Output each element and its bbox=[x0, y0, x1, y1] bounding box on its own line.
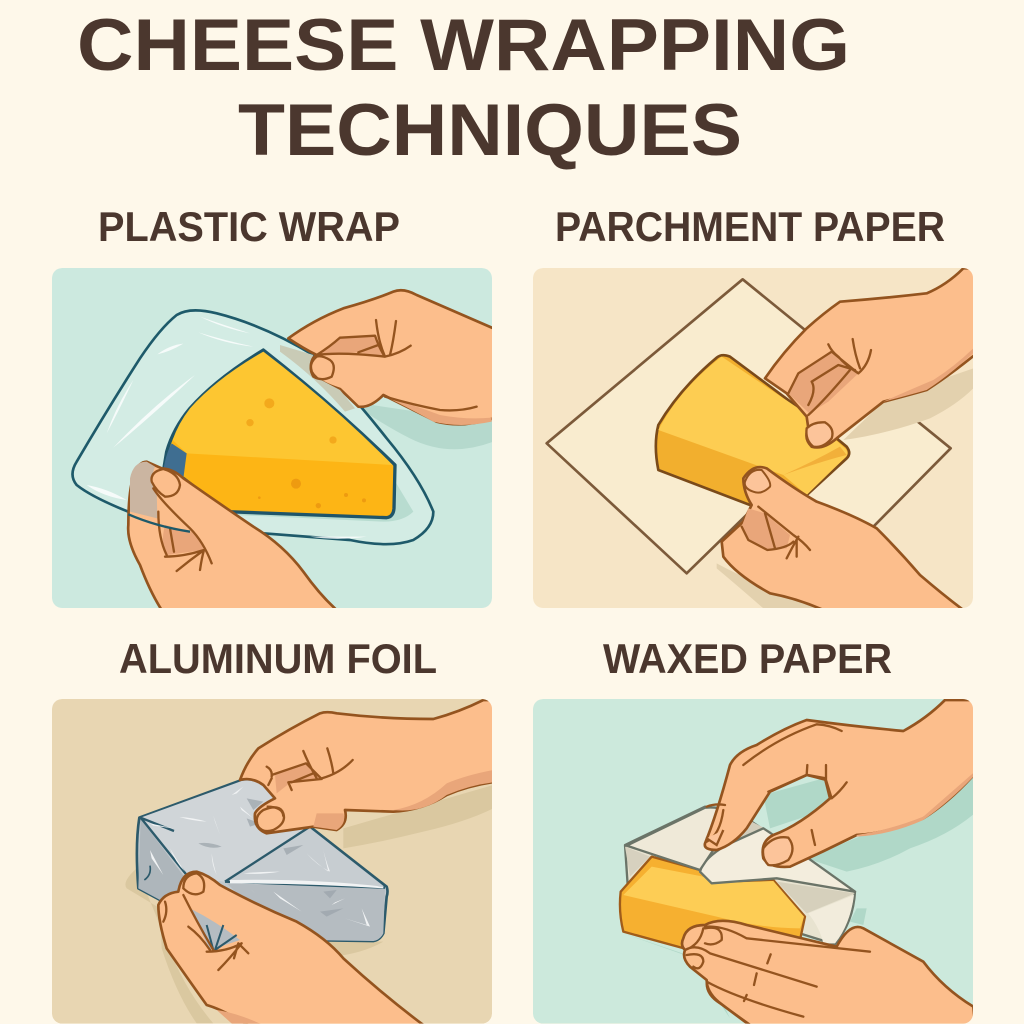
heading: parchment paper: PARCHMENT PAPER bbox=[555, 203, 945, 250]
cheese block bbox=[656, 355, 849, 505]
shadows bbox=[717, 368, 973, 608]
lower hand bbox=[722, 467, 963, 610]
lower hand bbox=[158, 872, 427, 1024]
title bbox=[77, 5, 850, 171]
right hand bbox=[280, 290, 493, 425]
title: CHEESE WRAPPING bbox=[77, 5, 850, 86]
heading: waxed paper: WAXED PAPER bbox=[603, 635, 892, 682]
panel: aluminum foil bbox=[52, 699, 497, 1024]
lower hand bbox=[682, 921, 977, 1024]
shadows bbox=[623, 772, 977, 1018]
heading: plastic wrap: PLASTIC WRAP bbox=[98, 203, 400, 250]
plastic film bbox=[72, 310, 433, 544]
foil package bbox=[137, 780, 387, 952]
panel: plastic wrap bbox=[52, 268, 493, 610]
shadows bbox=[125, 785, 493, 1023]
cheese block bbox=[620, 857, 805, 950]
upper hand bbox=[765, 268, 977, 447]
parchment sheet bbox=[547, 279, 951, 573]
title: TECHNIQUES bbox=[238, 90, 742, 171]
panel: parchment paper bbox=[533, 268, 977, 610]
waxed paper wrap bbox=[625, 807, 855, 944]
upper hand bbox=[240, 700, 497, 833]
cheese wedge bbox=[163, 350, 395, 518]
hand shadow bbox=[350, 402, 493, 449]
panel: waxed paper bbox=[533, 699, 977, 1024]
heading: aluminum foil: ALUMINUM FOIL bbox=[119, 635, 437, 682]
paper flap bbox=[700, 828, 855, 892]
upper hand bbox=[705, 700, 977, 867]
left hand bbox=[128, 462, 337, 610]
